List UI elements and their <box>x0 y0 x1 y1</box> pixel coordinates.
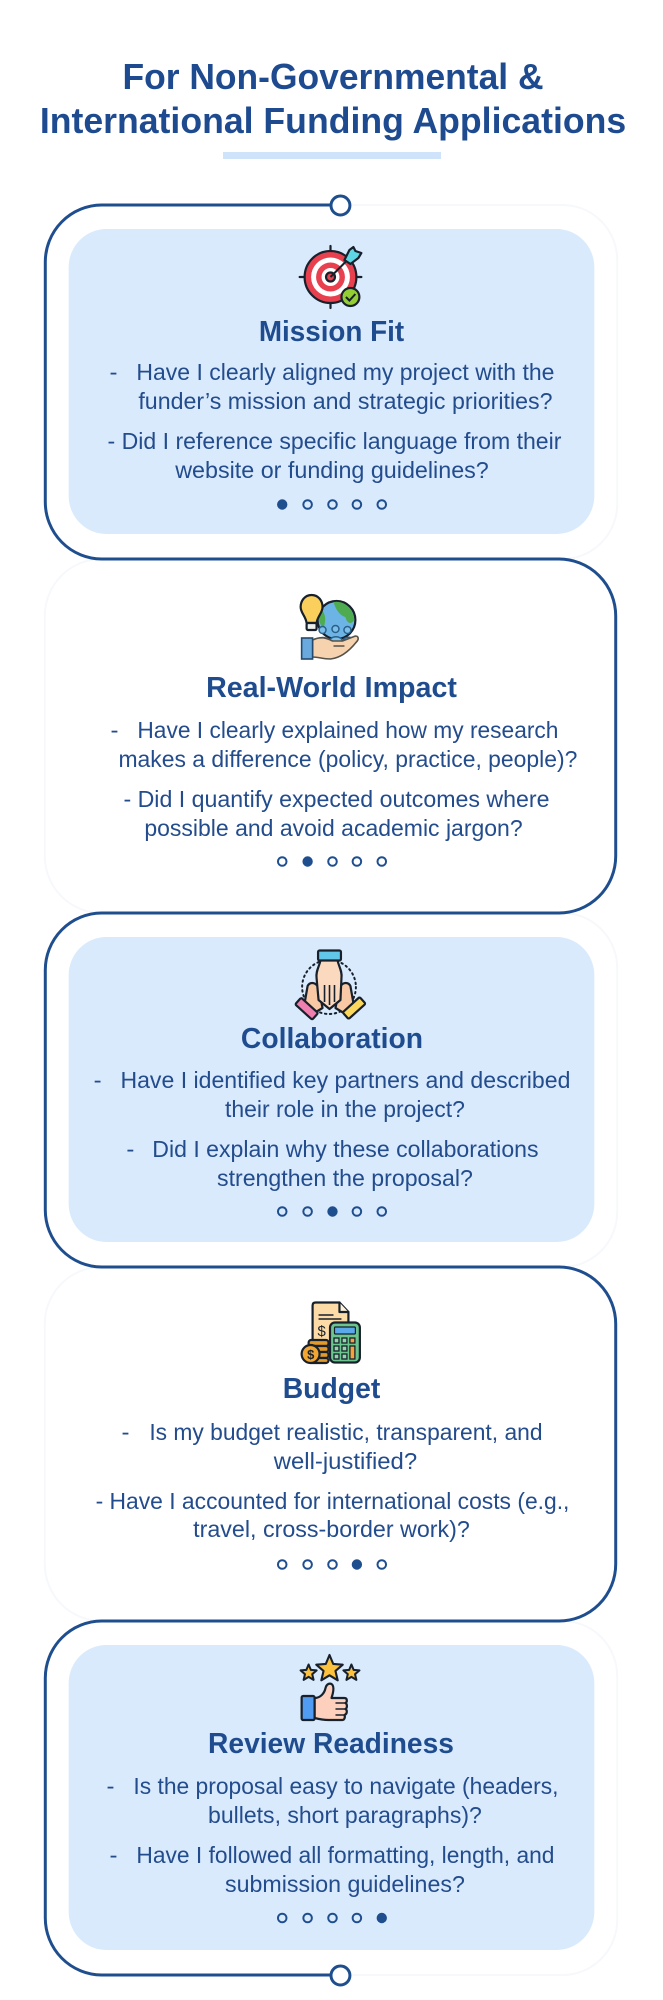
panel: Review Readiness <box>69 1645 594 1950</box>
icon: three joined hands <box>295 950 366 1020</box>
progress dots <box>278 1559 386 1570</box>
question 1: - <box>121 1419 129 1445</box>
question 2 <box>110 1842 554 1897</box>
card background <box>69 1645 594 1950</box>
question 2: - <box>126 1136 134 1162</box>
connector end node <box>331 1966 350 1985</box>
question 1: Have I clearly aligned my project with the <box>136 359 554 385</box>
question 2 <box>123 786 550 841</box>
question 1: - <box>111 717 118 743</box>
icon: invoice, calculator and coins: $ <box>318 1323 327 1340</box>
icon: target with arrow and check <box>300 246 361 308</box>
question 2: Did I explain why these collaborations <box>152 1136 539 1162</box>
title underline <box>223 152 441 159</box>
question 1 <box>111 717 577 772</box>
title: For Non-Governmental & <box>122 56 544 97</box>
panel: Mission Fit <box>69 229 594 534</box>
connector start node <box>331 196 350 215</box>
question 2: possible and avoid academic jargon? <box>144 815 523 841</box>
question 2: strengthen the proposal? <box>217 1165 473 1191</box>
panel: Real-World Impact <box>111 595 577 867</box>
title <box>40 56 626 141</box>
card background <box>69 229 594 534</box>
question 1: Is the proposal easy to navigate (headers, <box>133 1773 558 1799</box>
panel: Budget <box>96 1302 569 1570</box>
question 1 <box>110 359 554 414</box>
question 2: - Did I quantify expected outcomes where <box>123 786 550 812</box>
question 1: - <box>107 1773 114 1799</box>
question 2: travel, cross-border work)? <box>193 1516 470 1542</box>
question 2: website or funding guidelines? <box>174 457 489 483</box>
progress dots <box>278 856 386 867</box>
icon: globe, lightbulb and hand <box>301 595 358 659</box>
question 1: - <box>94 1067 102 1093</box>
progress dots <box>277 499 386 510</box>
question 1: Have I identified key partners and described <box>120 1067 570 1093</box>
progress dots <box>278 1206 386 1217</box>
question 1: well-justified? <box>273 1448 417 1474</box>
icon: invoice, calculator and coins: $ <box>307 1347 315 1362</box>
question 2: Have I followed all formatting, length, and <box>136 1842 554 1868</box>
connector line <box>45 205 616 1975</box>
question 2: - Have I accounted for international costs (e.g., <box>96 1488 569 1514</box>
question 1: Have I clearly explained how my research <box>137 717 558 743</box>
question 2 <box>96 1488 569 1542</box>
question 2: submission guidelines? <box>225 1871 465 1897</box>
question 1: funder’s mission and strategic priorities? <box>138 388 553 414</box>
question 1: makes a difference (policy, practice, people)? <box>118 746 577 772</box>
question 1 <box>121 1419 543 1474</box>
question 1: their role in the project? <box>225 1096 465 1122</box>
heading: Collaboration <box>241 1023 423 1055</box>
title: International Funding Applications <box>40 100 626 141</box>
icon: invoice, calculator and coins <box>302 1302 360 1363</box>
question 1: bullets, short paragraphs)? <box>208 1802 482 1828</box>
heading: Mission Fit <box>259 316 405 348</box>
question 2 <box>126 1136 539 1191</box>
heading: Budget <box>283 1373 381 1405</box>
icon: three stars and thumbs up <box>301 1655 359 1720</box>
heading: Review Readiness <box>208 1728 454 1760</box>
question 1: - <box>110 359 117 385</box>
question 1 <box>94 1067 570 1122</box>
heading: Real-World Impact <box>206 672 457 704</box>
progress dots <box>278 1913 387 1923</box>
question 1: Is my budget realistic, transparent, and <box>149 1419 543 1445</box>
panel: Collaboration <box>69 937 594 1242</box>
question 2 <box>108 428 562 483</box>
question 2: - Did I reference specific language from their <box>108 428 562 454</box>
question 1 <box>107 1773 558 1828</box>
card background <box>69 937 594 1242</box>
question 2: - <box>110 1842 117 1868</box>
